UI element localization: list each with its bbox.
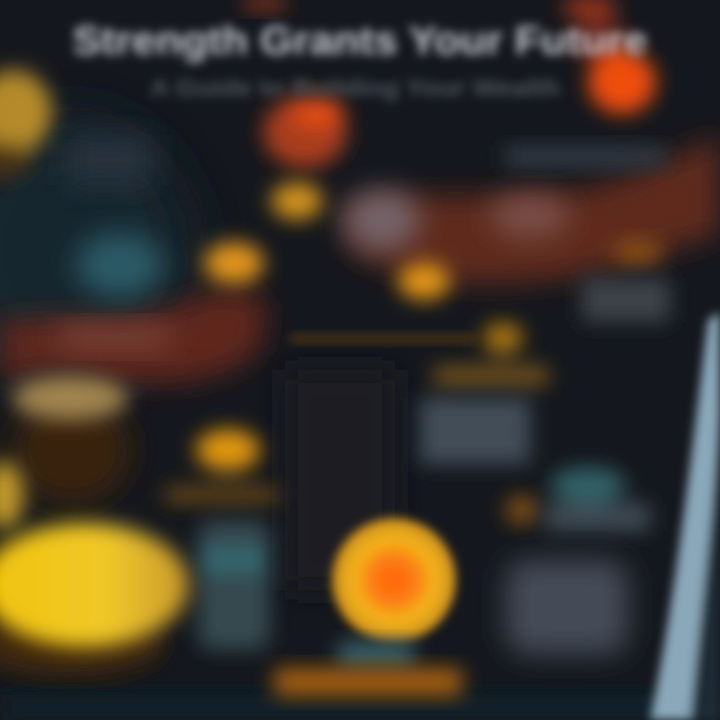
icon: orange circle <box>332 518 456 642</box>
panel: grey card right middle <box>420 398 530 464</box>
subtitle: A Guide to Building Your Wealth <box>150 75 560 102</box>
title: Strength Grants Your Future <box>72 19 648 63</box>
node: gold 1 <box>271 182 323 220</box>
node: gold lower left <box>165 429 277 503</box>
icon: red orange blob centre <box>263 96 347 168</box>
brown band: upper right <box>345 135 720 283</box>
brown band: left <box>0 291 268 384</box>
node: gold 3 <box>398 262 450 300</box>
panel: teal card left <box>76 233 164 297</box>
icon: coin stack left <box>0 376 132 529</box>
node: small amber right lower <box>505 495 539 525</box>
text block: upper left grey <box>68 135 153 185</box>
node: gold 2 <box>204 242 264 284</box>
panel: teal below orange circle <box>338 642 414 668</box>
panel: grey card on band right <box>490 194 570 238</box>
panel: teal card lower left <box>198 520 270 650</box>
text on left band <box>60 325 170 349</box>
panel: grey card bottom right <box>506 560 628 654</box>
label: orange bar <box>274 668 462 696</box>
node: gold right middle <box>434 322 548 386</box>
panel: grey card on band left <box>344 190 420 250</box>
icon: big gold coin <box>0 523 189 677</box>
stripe: light blue right edge <box>650 312 720 720</box>
connector line: centre <box>290 334 475 343</box>
panel: teal grey card lower right <box>545 467 650 531</box>
text block: upper right <box>505 146 665 168</box>
icon: top flame <box>241 0 289 11</box>
icon: top right orange blob <box>562 0 656 114</box>
icon: gold coin top left <box>0 70 52 178</box>
node: small gold on band right <box>612 240 664 264</box>
text block: right grey <box>582 278 670 322</box>
